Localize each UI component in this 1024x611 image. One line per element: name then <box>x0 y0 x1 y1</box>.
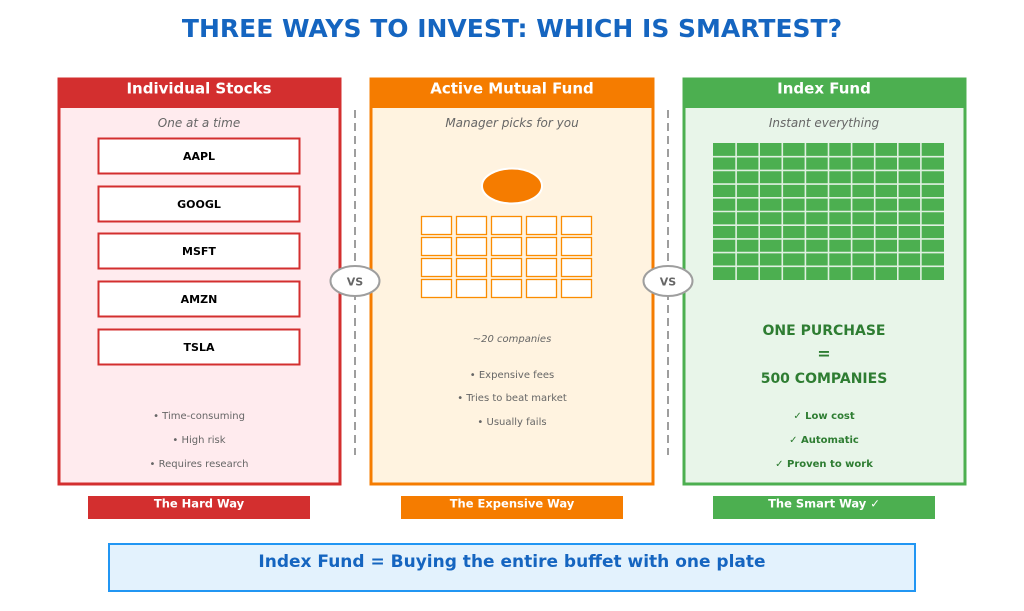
subtitle: Manager picks for you <box>445 116 579 130</box>
cons list: • Time-consuming <box>153 411 245 422</box>
label: the smart way <box>713 496 935 519</box>
cons list <box>457 370 567 428</box>
pros list: ✓ Low cost <box>793 411 855 422</box>
stock boxes: TSLA <box>184 341 215 354</box>
label: the hard way <box>88 496 310 519</box>
stock boxes: AAPL <box>183 150 215 163</box>
header: active mutual fund <box>370 78 654 108</box>
key message <box>761 323 887 387</box>
divider: vs 1: VS <box>347 276 363 288</box>
label: the smart way: The Smart Way ✓ <box>768 496 880 510</box>
key message: 500 COMPANIES <box>761 371 887 387</box>
grid: 20 companies <box>422 216 592 298</box>
label: the expensive way: The Expensive Way <box>450 496 575 510</box>
pros list <box>775 411 873 470</box>
cons list: • Usually fails <box>477 417 547 428</box>
panel: index fund <box>683 78 966 484</box>
divider: vs 1 <box>330 110 380 455</box>
grid: 500 companies <box>713 143 944 280</box>
key message: ONE PURCHASE <box>763 323 885 339</box>
divider: vs 2 <box>644 110 692 455</box>
stock boxes: GOOGL <box>177 198 221 211</box>
header: active mutual fund: Active Mutual Fund <box>430 80 594 98</box>
divider: vs 2: VS <box>660 276 676 288</box>
header: individual stocks: Individual Stocks <box>126 80 272 98</box>
cons list: • Requires research <box>150 459 248 470</box>
panel: individual stocks <box>58 78 341 484</box>
panel: active mutual fund <box>370 78 654 484</box>
stock boxes: AMZN <box>181 293 217 306</box>
pros list: ✓ Automatic <box>789 435 859 446</box>
cons list: • High risk <box>172 435 226 446</box>
title: THREE WAYS TO INVEST: WHICH IS SMARTEST? <box>182 14 842 43</box>
subtitle: Instant everything <box>769 116 880 130</box>
label: the expensive way <box>401 496 623 519</box>
caption: ~20 companies <box>473 334 551 345</box>
stock boxes: MSFT <box>182 245 216 258</box>
cons list <box>150 411 248 470</box>
icon: manager <box>482 168 542 204</box>
header: index fund <box>683 78 966 108</box>
pros list: ✓ Proven to work <box>775 459 873 470</box>
stock boxes <box>98 138 300 364</box>
callout: summary <box>109 544 915 591</box>
header: index fund: Index Fund <box>777 80 871 98</box>
cons list: • Tries to beat market <box>457 393 567 404</box>
callout: summary: Index Fund = Buying the entire buffet with one plate <box>258 552 766 572</box>
label: the hard way: The Hard Way <box>154 496 245 510</box>
cons list: • Expensive fees <box>470 370 554 381</box>
key message: = <box>817 344 831 363</box>
header: individual stocks <box>58 78 341 108</box>
subtitle: One at a time <box>158 116 240 130</box>
